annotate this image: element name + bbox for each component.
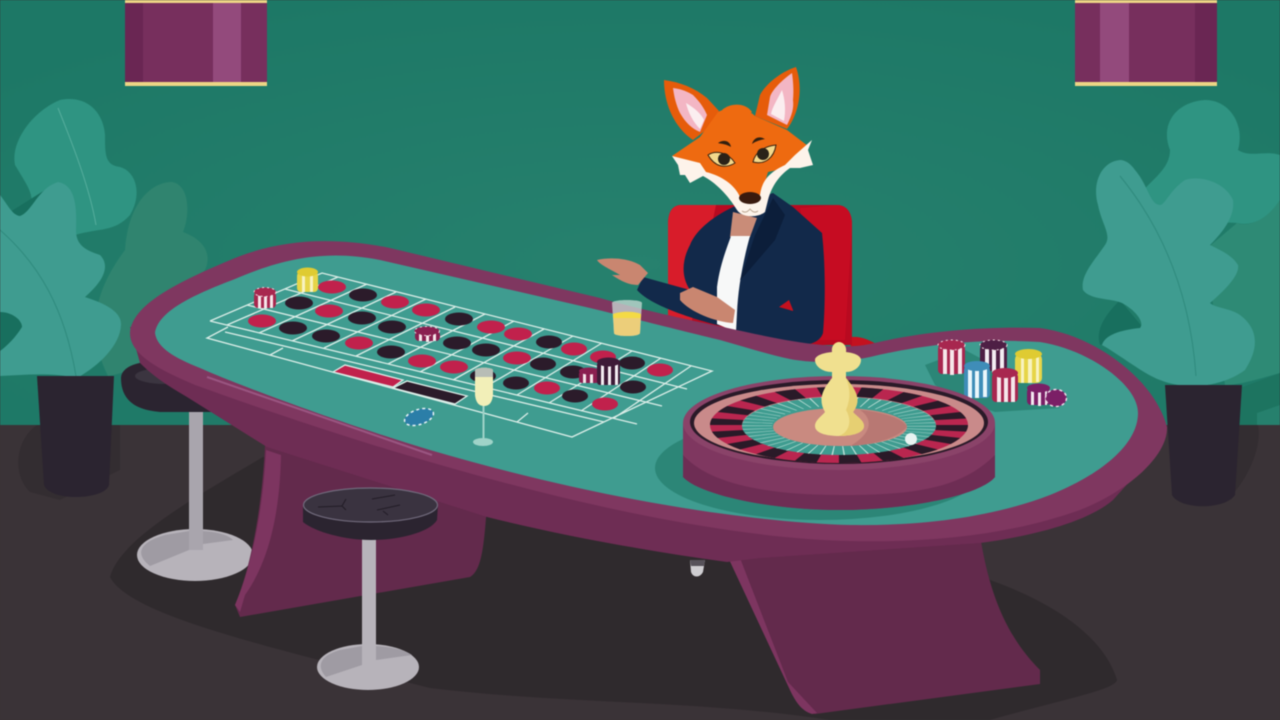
table left leg [235, 445, 487, 617]
wall [0, 0, 1280, 426]
black pockets [279, 288, 646, 402]
chips on layout [254, 268, 620, 429]
hand on chest [680, 287, 735, 323]
brows [718, 141, 731, 147]
lapel [740, 198, 785, 280]
third leaf [1205, 200, 1280, 385]
dark tall stack [597, 358, 620, 385]
betting grid [207, 273, 712, 437]
mouth [742, 209, 758, 212]
pocket ring [726, 392, 952, 458]
small red stack 2 [579, 368, 599, 383]
pink track [694, 384, 984, 462]
red chip stack [254, 288, 276, 308]
green ring [742, 397, 936, 455]
shirt [717, 236, 750, 332]
white cheeks [672, 140, 813, 216]
red gap [779, 300, 793, 311]
wheel body [683, 423, 995, 510]
table floor shadow [110, 450, 1117, 720]
left plant [0, 99, 208, 497]
purple stack [1027, 384, 1050, 406]
lighter patch [1257, 405, 1280, 425]
neck [730, 212, 757, 237]
back leaf [1140, 100, 1280, 240]
left ear [664, 80, 719, 140]
purple flat chip [1046, 390, 1066, 406]
table skirt [130, 327, 1140, 562]
chair caster [690, 560, 705, 576]
leaf midrib [1120, 176, 1196, 376]
table surface [155, 256, 1138, 525]
lamp right [1075, 0, 1217, 86]
stool pole [189, 405, 203, 550]
rim highlight [207, 377, 432, 455]
tuft [722, 105, 752, 117]
floor [0, 425, 1280, 720]
small red stack [414, 326, 440, 342]
seat creases [318, 495, 400, 515]
faint back leaf [95, 182, 208, 376]
back leaf [14, 99, 137, 235]
stool back [121, 362, 253, 581]
front leaf [0, 182, 121, 378]
right plant [1083, 100, 1280, 506]
champagne glass [473, 368, 493, 446]
yellow chip stack [297, 268, 318, 292]
jacket [637, 193, 825, 345]
juice glass [612, 300, 642, 336]
pot right [1165, 385, 1242, 506]
nose [739, 192, 761, 204]
stool base [137, 529, 253, 581]
dark lower wall [1235, 373, 1280, 425]
leaf midrib [0, 230, 76, 376]
dark leaf [1099, 300, 1145, 345]
chair [668, 205, 878, 350]
table rim [130, 241, 1167, 541]
chip shadow [925, 350, 1060, 412]
red stack 2 [992, 368, 1018, 402]
stool pole [362, 538, 376, 668]
table right leg [727, 535, 1040, 714]
pot left [37, 376, 114, 497]
face [672, 108, 808, 200]
shadow under front leaf [10, 190, 45, 225]
green ring spokes [757, 401, 921, 451]
right eye [753, 145, 776, 163]
pot shadow left [18, 425, 120, 500]
bet black [393, 381, 467, 404]
ball [905, 433, 917, 445]
red stack [938, 340, 965, 375]
right ear [755, 67, 800, 129]
bet red [333, 365, 403, 387]
fox head [664, 67, 813, 216]
finial [815, 342, 864, 436]
pot shadow right [1200, 425, 1259, 500]
stool front [303, 488, 438, 690]
leaf dark hole [0, 312, 22, 351]
stool seat side [303, 505, 438, 540]
lamp left [125, 0, 267, 86]
stool seat [121, 362, 230, 412]
chair back [668, 205, 852, 345]
blue flat chip [402, 405, 436, 429]
dark stack [980, 340, 1007, 373]
number grid outline [207, 273, 712, 437]
wheel shadow [655, 439, 960, 520]
hub [773, 408, 907, 446]
roulette wheel [683, 342, 995, 510]
blue stack [964, 361, 990, 398]
stool base [317, 644, 419, 690]
yellow stack [1015, 349, 1042, 383]
left eye [708, 152, 735, 166]
hand on table [597, 258, 648, 285]
chips right [925, 340, 1066, 412]
red pockets [248, 280, 673, 410]
wheel top rim [683, 376, 995, 470]
front leaf [1083, 160, 1255, 386]
fox body [597, 193, 825, 345]
chair leg [850, 337, 878, 350]
stool seat top [304, 488, 438, 522]
dark ring [690, 380, 988, 464]
